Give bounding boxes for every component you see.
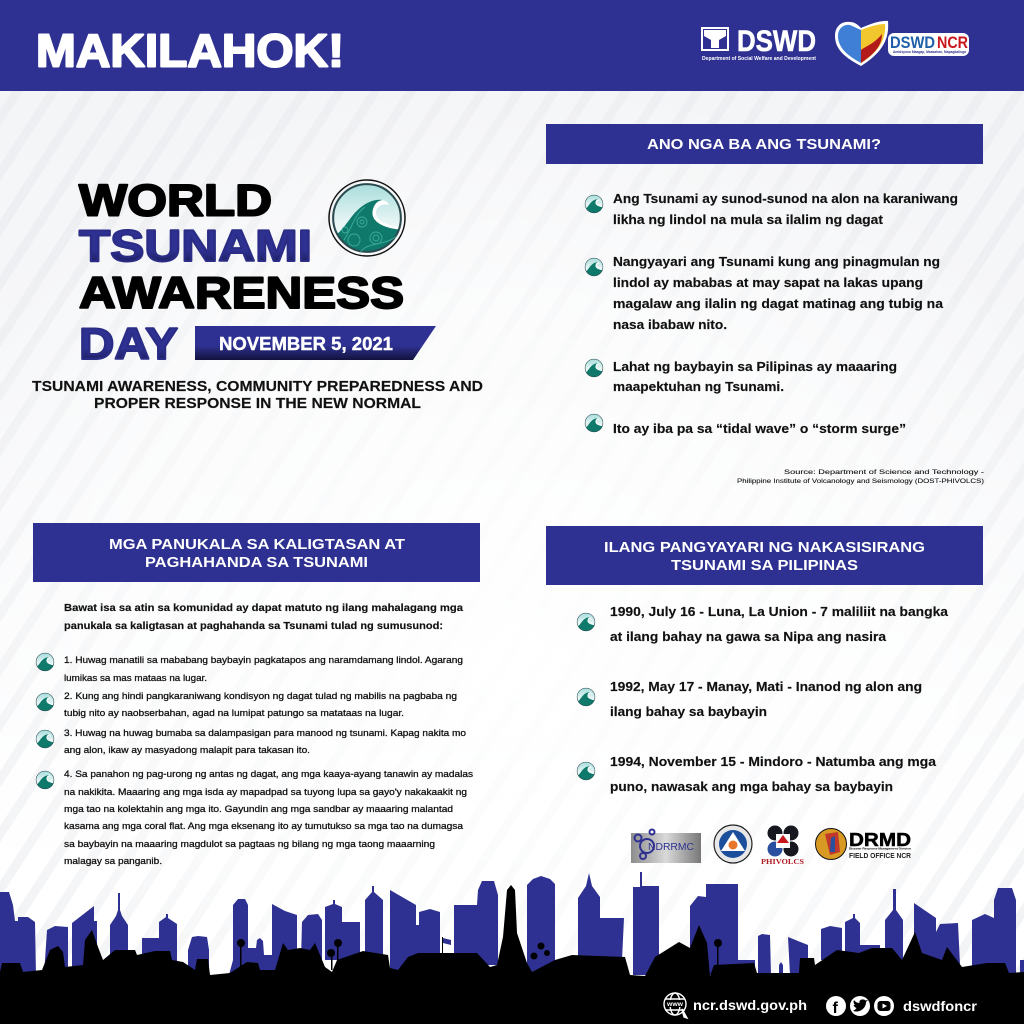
event 1994: puno, nawasak ang mga bahay sa baybayin [610, 779, 893, 794]
trees [237, 939, 722, 970]
bullet 2 [585, 254, 944, 332]
panel heading [33, 523, 480, 582]
item 1 [36, 653, 463, 683]
icon: facebook: f [832, 1000, 838, 1017]
item 3: 3. Huwag na huwag bumaba sa dalampasigan para manood ng tsunami. Kapag nakita mo [64, 727, 466, 738]
logo: civil defense seal [714, 825, 752, 863]
logo: DRMD: DRMD [849, 829, 911, 850]
item 4: 4. Sa panahon ng pag-urong ng antas ng dagat, ang mga kaaya-ayang tanawin ay madalas [64, 768, 473, 779]
logo: DSWD NCR [835, 21, 969, 66]
title: WORLD: WORLD [79, 176, 272, 226]
panel: ano nga ba ang tsunami [546, 124, 984, 485]
event 1992: 1992, May 17 - Manay, Mati - Inanod ng alon ang [610, 679, 922, 694]
panel heading: ANO NGA BA ANG TSUNAMI? [647, 137, 881, 153]
item 4: mga tao na kolektahin ang mga ito. Gayundin ang mga sandbar ay maaaring malantad [64, 803, 453, 814]
icon: website globe: www [666, 1002, 683, 1008]
bullet 4: Ito ay iba pa sa “tidal wave” o “storm surge” [613, 421, 906, 436]
item 4: sa baybayin na maaaring magdulot sa pagtaas ng bilang ng mga taong maaarning [64, 838, 435, 849]
item 2 [36, 690, 457, 718]
event 1990 [577, 604, 949, 644]
bullet 1 [585, 191, 958, 227]
event 1992: ilang bahay sa baybayin [610, 704, 767, 719]
bullet 3 [585, 359, 897, 394]
logo: DRMD: Disaster Response Management Division [849, 846, 911, 850]
social handle: dswdfoncr [903, 998, 978, 1014]
title block [32, 176, 483, 412]
item 2: tubig nito ay naobserbahan, agad na lumipat patungo sa matataas na lugar. [64, 707, 404, 718]
icon: youtube [874, 996, 894, 1016]
bullet 2: nasa ibabaw nito. [613, 317, 727, 332]
event 1990: at ilang bahay na gawa sa Nipa ang nasira [610, 629, 887, 644]
title: AWARENESS: AWARENESS [79, 269, 404, 318]
header band [0, 0, 1024, 91]
intro text [64, 602, 463, 632]
icon: wave emblem [329, 180, 405, 256]
event 1994: 1994, November 15 - Mindoro - Natumba ang mga [610, 754, 937, 769]
bullet 4 [585, 414, 906, 436]
header title: MAKILAHOK! [36, 24, 344, 76]
logo: DRMD [816, 828, 911, 860]
item 4 [36, 768, 473, 866]
panel heading: ILANG PANGYAYARI NG NAKASISIRANG [604, 540, 925, 556]
bullet 1: Ang Tsunami ay sunod-sunod na alon na karaniwang [613, 191, 958, 206]
panel heading [546, 526, 983, 585]
item 4: kasama ang mga coral flat. Ang mga eksenang ito ay tumutukso sa mga tao na dumagsa [64, 820, 464, 831]
item 4: na nakikita. Maaaring ang mga isda ay mapadpad sa tuyong lupa sa gayo'y nakakaakit ng [64, 786, 467, 797]
bullet 2: Nangyayari ang Tsunami kung ang pinagmulan ng [613, 254, 940, 269]
icon: facebook [826, 996, 846, 1017]
bullet 3: maapektuhan ng Tsunami. [613, 379, 784, 394]
source note: Source: Department of Science and Technology - [784, 469, 984, 476]
item 2: 2. Kung ang hindi pangkaraniwang kondisyon ng dagat tulad ng mabilis na pagbaba ng [64, 690, 457, 701]
subtitle [32, 379, 483, 412]
logo: DRMD: FIELD OFFICE NCR [849, 853, 911, 860]
panel: ilang pangyayari [546, 526, 983, 794]
skyline: blue buildings [0, 872, 1024, 975]
source note: Philippine Institute of Volcanology and Seismology (DOST-PHIVOLCS) [737, 478, 984, 485]
bullet 2: magalaw ang ilalin ng dagat matinag ang tubig na [613, 296, 944, 311]
logo: PHIVOLCS: PHIVOLCS [761, 857, 804, 866]
panel heading: MGA PANUKALA SA KALIGTASAN AT [109, 537, 405, 553]
logo: DSWD [702, 25, 816, 62]
panel: mga panukala [33, 523, 480, 866]
item 1: lumikas sa mas mataas na lugar. [64, 672, 207, 683]
panel heading: PAGHAHANDA SA TSUNAMI [145, 555, 368, 571]
icon: website globe [664, 993, 687, 1018]
item 3 [36, 727, 466, 755]
website url: ncr.dswd.gov.ph [693, 997, 807, 1013]
event 1994 [577, 754, 937, 794]
date banner: NOVEMBER 5, 2021 [219, 334, 393, 354]
panel heading [546, 124, 983, 164]
logo: DSWD: DSWD [737, 25, 816, 58]
item 1: 1. Huwag manatili sa mababang baybayin pagkatapos ang naramdamang lindol. Agarang [64, 654, 463, 665]
intro text: Bawat isa sa atin sa komunidad ay dapat matuto ng ilang mahalagang mga [64, 602, 463, 614]
skyline: black silhouette [0, 885, 1024, 1024]
title: TSUNAMI: TSUNAMI [79, 222, 312, 271]
bullet 2: lindol ay mababas at may sapat na lakas upang [613, 275, 923, 290]
subtitle: PROPER RESPONSE IN THE NEW NORMAL [94, 396, 421, 412]
source note [737, 469, 984, 485]
logo: PHIVOLCS [761, 826, 804, 866]
flag [442, 937, 451, 955]
date banner [195, 326, 436, 360]
title: DAY: DAY [79, 320, 178, 369]
bullet 1: likha ng lindol na mula sa ilalim ng dagat [613, 212, 884, 227]
item 4: malagay sa panganib. [64, 855, 162, 866]
event 1992 [577, 679, 922, 719]
logo: DSWD NCR: DSWD [890, 34, 935, 52]
logo: NDRRMC [631, 830, 701, 863]
item 3: ang alon, ikaw ay masyadong malapit para takasan ito. [64, 744, 310, 755]
bullet 3: Lahat ng baybayin sa Pilipinas ay maaaring [613, 359, 897, 374]
subtitle: TSUNAMI AWARENESS, COMMUNITY PREPAREDNESS AND [32, 379, 483, 395]
logo: NDRRMC: NDRRMC [648, 842, 694, 853]
panel heading: TSUNAMI SA PILIPINAS [671, 558, 858, 574]
intro text: panukala sa kaligtasan at paghahanda sa Tsunami tulad ng sumusunod: [64, 620, 443, 632]
logo: DSWD: Department of Social Welfare and Development [702, 56, 816, 62]
logo: DSWD NCR: NCR [937, 34, 968, 52]
partner logos [631, 825, 911, 866]
event 1990: 1990, July 16 - Luna, La Union - 7 maliliit na bangka [610, 604, 949, 619]
icon: twitter [850, 996, 870, 1016]
footer contacts [664, 993, 978, 1018]
logo: DSWD NCR: Ambisyoso Maagap, Maasahan, Mapagkalinga [893, 50, 967, 54]
